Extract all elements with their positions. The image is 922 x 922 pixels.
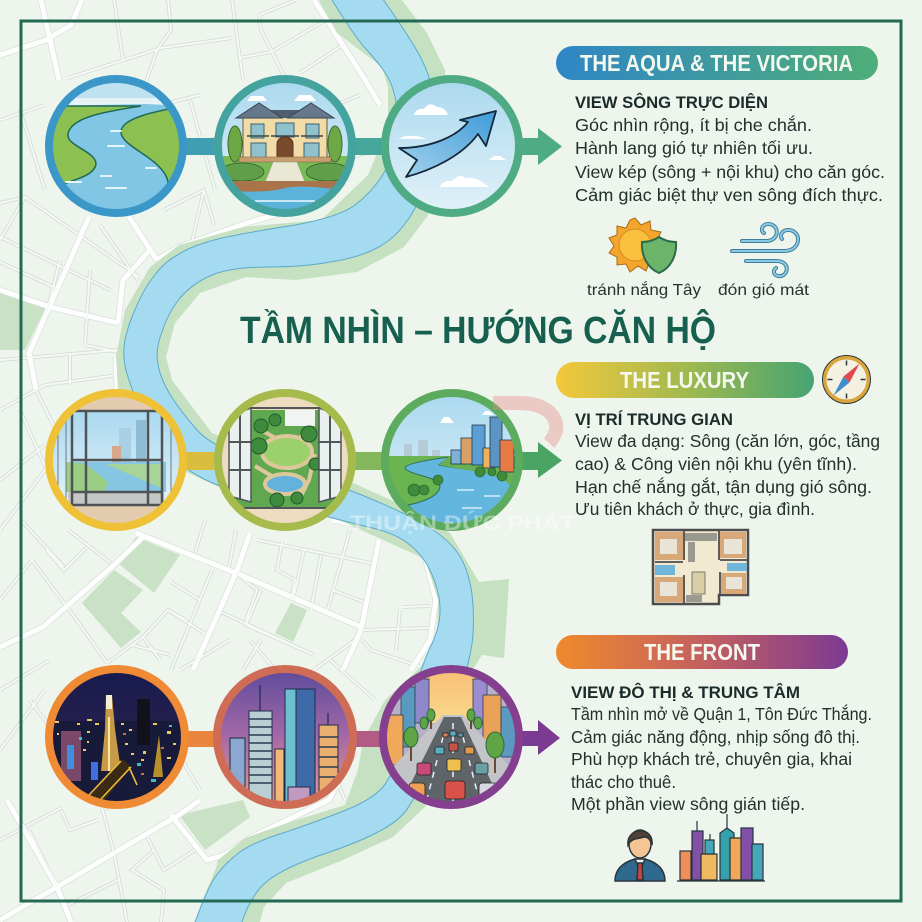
icon labels: đón gió mát [718,282,810,299]
text block: middle position: VỊ TRÍ TRUNG GIAN [575,410,733,429]
icon: businessman [615,830,665,881]
icon: sun with shield [609,218,676,273]
icon: compass [822,356,870,404]
text block: city view: thác cho thuê. [571,772,676,792]
icon: city skyline [677,814,765,881]
badge: The Front [556,635,848,669]
text block: city view: VIEW ĐÔ THỊ & TRUNG TÂM [571,683,800,702]
text block: middle position: cao) & Công viên nội khu (yên tĩnh). [575,454,857,474]
text block: river view: Hành lang gió tự nhiên tối ưu. [575,138,813,158]
text block: middle position: Ưu tiên khách ở thực, gia đình. [575,499,815,519]
circle: park view [215,390,355,530]
river bank [116,0,509,922]
text block: middle position: View đa dạng: Sông (căn lớn, góc, tầng [575,431,880,451]
badge: The Aqua and The Victoria [556,46,878,80]
text block: city view: Cảm giác năng động, nhịp sống đô thị. [571,727,860,747]
circle: night city [47,667,187,807]
icon: wind [732,224,798,276]
circle: busy road [381,667,521,807]
text block: river view: Cảm giác biệt thự ven sông đích thực. [575,185,883,205]
text block: city view: Một phần view sông gián tiếp. [571,794,805,814]
badge: The Aqua and The Victoria: THE AQUA & THE VICTORIA [580,50,853,76]
title: TẦM NHÌN – HƯỚNG CĂN HỘ [240,307,716,352]
circle: window view [46,390,186,530]
watermark: THUẬN ĐỨC PHÁT [350,511,575,535]
circle: sky with arrow [382,76,522,216]
row 3 connectors and arrow [185,720,560,755]
river [124,0,473,922]
streets [0,0,436,922]
icon: floor plan [653,530,748,604]
circle: skyscrapers at dusk [215,667,355,808]
text block: river view: View kép (sông + nội khu) cho căn góc. [575,162,885,182]
row 2 connectors and arrow [183,442,562,478]
circle: villa by the river [215,76,355,216]
text block: river view: VIEW SÔNG TRỰC DIỆN [575,93,768,112]
icon labels [587,280,810,299]
badge: The Front: THE FRONT [644,639,761,665]
text block: city view: Phù hợp khách trẻ, chuyên gia, khai [571,749,852,769]
badge: The Luxury [556,362,814,398]
text block: city view: Tầm nhìn mở về Quận 1, Tôn Đức Thắng. [571,703,872,724]
icon labels: tránh nắng Tây [587,280,701,299]
text block: middle position [575,410,880,519]
badge: The Luxury: THE LUXURY [620,367,749,393]
text block: river view: Góc nhìn rộng, ít bị che chắn. [575,114,812,135]
circle: river and city [382,390,522,536]
row 1 connectors and arrow [183,128,562,165]
watermark [350,403,575,535]
park areas [0,290,307,850]
circle: river view [46,76,186,216]
text block: middle position: Hạn chế nắng gắt, tận dụng gió sông. [575,476,872,497]
text block: city view [571,683,872,814]
text block: river view [575,93,885,205]
